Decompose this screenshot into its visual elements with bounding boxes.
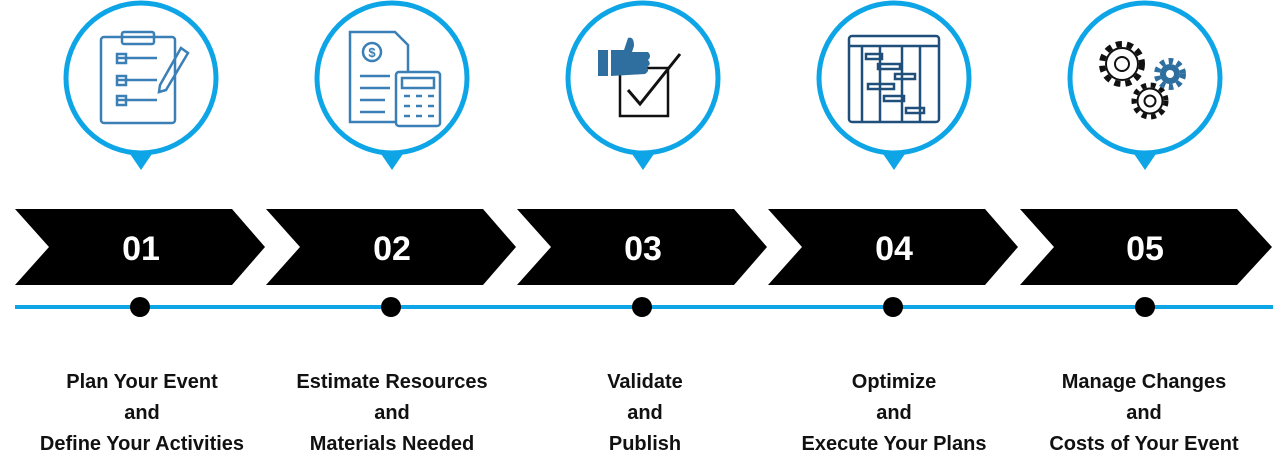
label 2: Estimate Resources	[296, 371, 488, 393]
dot 1	[130, 297, 150, 317]
dot 3	[632, 297, 652, 317]
label 4: Execute Your Plans	[802, 433, 986, 455]
label 1: and	[124, 402, 160, 424]
icon: gantt chart	[849, 36, 939, 122]
icon circle 2	[317, 3, 467, 170]
label 3: Validate	[607, 371, 683, 393]
icon: gears	[1102, 44, 1166, 117]
label 5: Costs of Your Event	[1049, 433, 1239, 455]
icon circle 2: $	[368, 45, 376, 60]
chevron 01	[15, 209, 265, 285]
dot 5	[1135, 297, 1155, 317]
chevron 01: 01	[122, 230, 160, 268]
label 3: and	[627, 402, 663, 424]
dot 4	[883, 297, 903, 317]
icon circle 5	[1070, 3, 1220, 170]
chevron 04: 04	[875, 230, 913, 268]
chevron 05	[1020, 209, 1272, 285]
icon circle 3	[568, 3, 718, 170]
icon circle 1	[66, 3, 216, 170]
label 5: Manage Changes	[1062, 371, 1226, 393]
chevron 02: 02	[373, 230, 411, 268]
timeline line	[15, 305, 1273, 309]
icon: invoice and calculator	[350, 32, 440, 126]
chevron 03: 03	[624, 230, 662, 268]
label 2: Materials Needed	[310, 433, 474, 455]
chevron 04	[768, 209, 1018, 285]
chevron 02	[266, 209, 516, 285]
icon: thumbs up with check	[620, 68, 668, 116]
step 2	[266, 3, 516, 455]
step 3	[517, 3, 767, 455]
step 1	[15, 3, 265, 455]
label 1: Plan Your Event	[66, 371, 218, 393]
step 4	[768, 3, 1018, 455]
label 5: and	[1126, 402, 1162, 424]
step 5	[1020, 3, 1272, 455]
chevron 03	[517, 209, 767, 285]
dot 2	[381, 297, 401, 317]
chevron 05: 05	[1126, 230, 1164, 268]
label 2: and	[374, 402, 410, 424]
label 3: Publish	[609, 433, 681, 455]
icon circle 4	[819, 3, 969, 170]
icon: clipboard	[101, 32, 188, 123]
label 1: Define Your Activities	[40, 433, 244, 455]
label 4: Optimize	[852, 371, 936, 393]
label 4: and	[876, 402, 912, 424]
